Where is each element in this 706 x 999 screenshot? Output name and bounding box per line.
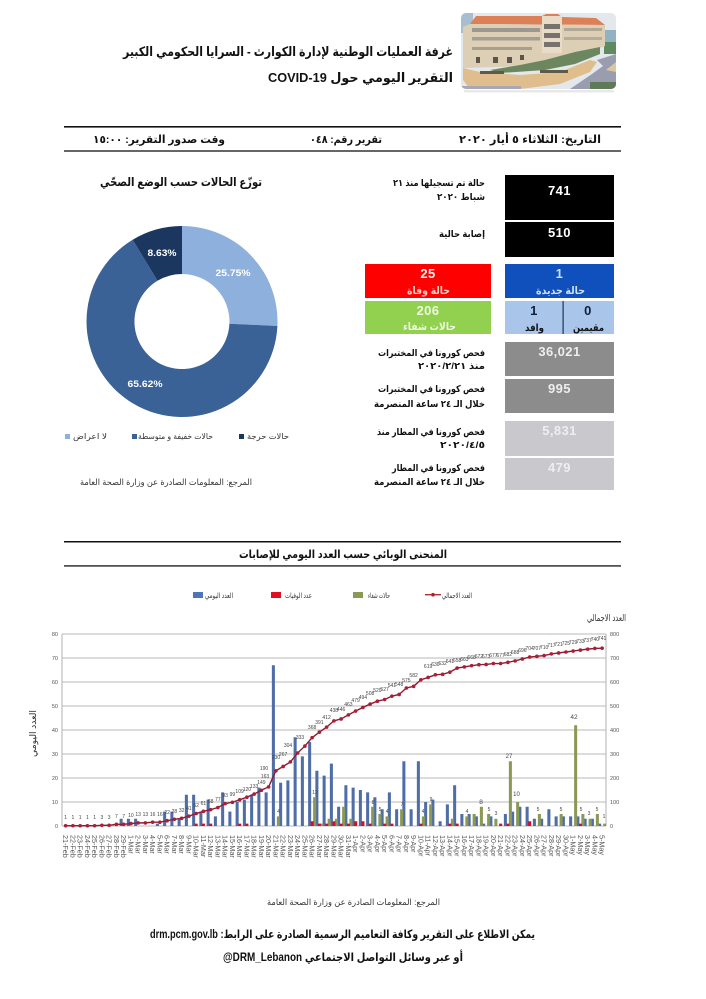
cumulative data labels: 7 xyxy=(115,814,118,820)
stat: airport tests total: فحص كورونا في المطار منذ xyxy=(377,427,485,438)
stat: lab tests total: فحص كورونا في المختبرات xyxy=(378,348,485,359)
recovery data labels: 5 xyxy=(596,807,599,813)
stat: total cases xyxy=(393,175,614,220)
cumulative data labels: 673 xyxy=(482,654,490,660)
date axis labels: 1-Mar xyxy=(126,835,135,854)
left axis labels: 80 xyxy=(52,632,58,638)
right axis labels: 200 xyxy=(610,776,619,782)
cumulative data labels: 391 xyxy=(315,720,324,726)
cumulative data labels: 494 xyxy=(359,695,367,701)
recovery data labels: 12 xyxy=(312,790,318,796)
chart legend: العدد اليومي xyxy=(205,591,233,600)
cumulative data labels: 619 xyxy=(424,664,432,670)
stat: airport tests 24h: 479 xyxy=(548,460,571,475)
stat: airport tests total: ٢٠٢٠/٤/٥ xyxy=(440,440,485,451)
date axis labels: 7-Apr xyxy=(395,835,404,853)
date axis labels: 18-Mar xyxy=(250,835,259,858)
footer links: أو عبر وسائل التواصل الاجتماعي ‎@DRM_Lebanon xyxy=(223,949,463,965)
date axis labels: 8-Apr xyxy=(402,835,411,853)
recovery data labels: 4 xyxy=(277,809,280,815)
cumulative data labels: 688 xyxy=(511,650,519,656)
cumulative data labels: 99 xyxy=(230,792,235,798)
right axis labels: 800 xyxy=(610,632,619,638)
date axis labels: 19-Apr xyxy=(482,835,491,857)
date axis labels: 5-May xyxy=(598,835,607,855)
cumulative data labels: 548 xyxy=(395,682,403,688)
stat: new cases xyxy=(505,264,614,298)
date axis labels: 16-Mar xyxy=(235,835,244,858)
stat: recoveries: 206 xyxy=(417,303,439,318)
cumulative data labels: 582 xyxy=(409,673,418,679)
cumulative data labels: 368 xyxy=(308,725,316,731)
cumulative data labels: 438 xyxy=(330,708,338,714)
stat: total cases: حالة تم تسجيلها منذ ٢١ xyxy=(393,178,485,189)
panel: key figures xyxy=(365,175,614,490)
date axis labels: 15-Apr xyxy=(453,835,462,857)
recovery data labels: 3 xyxy=(495,811,498,817)
cumulative data labels: 133 xyxy=(250,784,258,790)
left axis labels: 10 xyxy=(52,800,58,806)
right axis labels: 700 xyxy=(610,656,619,662)
right axis labels: 500 xyxy=(610,704,619,710)
left axis labels: 30 xyxy=(52,752,58,758)
recovery data labels: 8 xyxy=(479,799,483,806)
cumulative data labels: 1 xyxy=(79,815,82,821)
date axis labels: 3-Apr xyxy=(366,835,375,853)
date axis labels: 9-Apr xyxy=(409,835,418,853)
cumulative data labels: 93 xyxy=(222,793,228,799)
date axis labels: 25-Apr xyxy=(525,835,534,857)
cumulative data labels: 463 xyxy=(344,702,353,708)
cumulative data labels: 230 xyxy=(272,755,280,761)
date axis labels: 29-Apr xyxy=(554,835,563,857)
recovery data labels: 5 xyxy=(580,807,583,813)
recovery data labels: 8 xyxy=(372,800,375,806)
stat: current cases xyxy=(439,222,614,257)
cumulative data labels: 68 xyxy=(208,799,214,805)
stat: total cases: 741 xyxy=(548,183,571,198)
date axis labels: 19-Mar xyxy=(257,835,266,858)
recovery data labels: 5 xyxy=(379,807,382,813)
recovery data labels: 27 xyxy=(506,754,513,760)
date axis labels: 22-Mar xyxy=(279,835,288,858)
cumulative data labels: 412 xyxy=(322,715,331,721)
cumulative data labels: 13 xyxy=(143,812,148,818)
cumulative data labels: 575 xyxy=(402,678,411,684)
cumulative data labels: 3 xyxy=(101,815,104,821)
date axis labels: 6-Mar xyxy=(163,835,172,854)
cumulative data labels: 446 xyxy=(337,707,345,713)
cumulative data labels: 1 xyxy=(93,815,96,821)
panel: health status donut xyxy=(65,175,289,487)
cumulative data labels: 3 xyxy=(108,815,111,821)
cumulative data labels: 149 xyxy=(257,780,266,786)
stat: deaths: 25 xyxy=(420,266,436,281)
stat: lab tests 24h: 995 xyxy=(548,381,571,396)
stat: residents and arrivals: 0 xyxy=(584,303,592,318)
donut chart: 65.62% xyxy=(128,379,162,389)
cumulative data labels: 190 xyxy=(260,766,268,772)
date axis labels: 31-Mar xyxy=(344,835,353,858)
left axis labels xyxy=(52,632,58,830)
cumulative data labels: 479 xyxy=(351,698,360,704)
title: غرفة العمليات الوطنية لإدارة الكوارث - السرايا الحكومي الكبير xyxy=(122,44,453,59)
date axis labels: 4-Mar xyxy=(148,835,157,854)
donut chart xyxy=(87,226,278,417)
date axis labels: 21-Mar xyxy=(271,835,280,858)
date axis labels: 26-Feb xyxy=(97,835,106,858)
cumulative data labels: 632 xyxy=(438,661,447,667)
cumulative data labels: 721 xyxy=(554,642,563,648)
cumulative data labels: 668 xyxy=(467,655,476,661)
stat: deaths xyxy=(365,264,491,298)
cumulative data labels: 304 xyxy=(284,743,292,749)
recovery data labels: 3 xyxy=(588,811,591,817)
date axis labels: 12-Mar xyxy=(206,835,215,858)
report info bar: تقرير رقم: ٠٤٨ xyxy=(310,134,382,146)
stat: airport tests total: 5,831 xyxy=(542,423,577,438)
cumulative data labels: 16 xyxy=(150,812,156,818)
cumulative data labels: 541 xyxy=(388,683,396,689)
date axis labels: 15-Mar xyxy=(228,835,237,858)
right axis labels: 300 xyxy=(610,752,619,758)
date axis labels: 17-Mar xyxy=(242,835,251,858)
stat: lab tests 24h: خلال الـ ٢٤ ساعة المنصرمة xyxy=(374,399,485,410)
right axis labels: 0 xyxy=(610,824,613,830)
date axis labels: 8-Mar xyxy=(177,835,186,854)
date axis labels: 2-Apr xyxy=(358,835,367,853)
date axis labels: 6-Apr xyxy=(387,835,396,853)
date axis labels: 13-Mar xyxy=(213,835,222,858)
stat: recoveries xyxy=(365,301,491,334)
date axis labels: 30-Mar xyxy=(337,835,346,858)
date axis labels: 17-Apr xyxy=(467,835,476,857)
left axis labels: 50 xyxy=(52,704,58,710)
date axis labels: 5-Apr xyxy=(380,835,389,853)
right axis labels xyxy=(610,632,619,830)
date axis labels: 14-Apr xyxy=(445,835,454,857)
cumulative data labels: 7 xyxy=(122,814,125,820)
date axis labels: 23-Apr xyxy=(511,835,520,857)
date axis labels: 23-Feb xyxy=(76,835,85,858)
left axis labels: 70 xyxy=(52,656,58,662)
recovery data labels: 42 xyxy=(570,714,578,721)
chart legend: العدد الاجمالي xyxy=(442,591,472,600)
cumulative data labels: 16 xyxy=(157,812,163,818)
stat: lab tests 24h xyxy=(374,379,614,413)
cumulative data labels: 630 xyxy=(431,662,440,668)
date axis labels: 23-Mar xyxy=(286,835,295,858)
date axis labels: 5-Mar xyxy=(155,835,164,854)
donut legend: حالات حرجة xyxy=(247,432,289,441)
stat: total cases: شباط ٢٠٢٠ xyxy=(437,192,485,203)
stat: lab tests 24h: فحص كورونا في المختبرات xyxy=(378,384,485,395)
right axis labels: 100 xyxy=(610,800,619,806)
donut legend xyxy=(65,432,289,441)
date axis labels: 11-Apr xyxy=(424,835,433,857)
date axis labels: 22-Feb xyxy=(68,835,77,858)
cumulative data labels: 28 xyxy=(172,809,177,815)
date axis labels: 1-Apr xyxy=(351,835,360,853)
cumulative data labels: 677 xyxy=(489,653,498,659)
report info bar: التاريخ: الثلاثاء ٥ أيار ٢٠٢٠ xyxy=(459,132,601,146)
date axis labels: 27-Apr xyxy=(540,835,549,857)
bars: daily cases xyxy=(120,665,606,826)
date axis labels: 2-May xyxy=(576,835,585,855)
cumulative data labels: 704 xyxy=(525,646,534,652)
cumulative data labels: 682 xyxy=(504,652,512,658)
recovery data labels: 1 xyxy=(603,814,606,820)
cumulative data labels: 508 xyxy=(366,691,374,697)
cumulative data labels: 520 xyxy=(373,688,382,694)
recovery data labels: 9 xyxy=(430,797,433,803)
cumulative data labels: 710 xyxy=(540,645,548,651)
date axis labels: 1-May xyxy=(569,835,578,855)
left axis labels: 60 xyxy=(52,680,58,686)
left axis labels: 20 xyxy=(52,776,58,782)
image: Grand Serail building xyxy=(461,13,616,92)
date axis labels: 10-Apr xyxy=(416,835,425,857)
cumulative data labels: 725 xyxy=(562,641,570,647)
cumulative data labels: 13 xyxy=(135,812,141,818)
cumulative data labels: 672 xyxy=(475,654,483,660)
stat: recoveries: حالات شفاء xyxy=(403,321,456,333)
recovery data labels xyxy=(277,714,606,820)
donut chart: 8.63% xyxy=(148,248,176,258)
date axis labels: 26-Mar xyxy=(308,835,317,858)
date axis labels: 20-Mar xyxy=(264,835,273,858)
report info bar xyxy=(64,126,621,152)
cumulative data labels: 77 xyxy=(215,797,221,803)
stat: airport tests 24h xyxy=(374,458,614,490)
stat: current cases: إصابة حالية xyxy=(439,229,485,240)
cumulative data labels: 120 xyxy=(243,787,251,793)
cumulative data labels: 741 xyxy=(598,636,606,642)
stat: residents and arrivals: وافد xyxy=(525,323,544,334)
chart legend: حالات شفاء xyxy=(368,591,390,600)
date axis labels: 7-Mar xyxy=(170,835,179,854)
recovery data labels: 5 xyxy=(560,807,563,813)
date axis labels: 22-Apr xyxy=(503,835,512,857)
cumulative data labels: 1 xyxy=(86,815,89,821)
cumulative data labels: 333 xyxy=(296,735,304,741)
right axis labels: 400 xyxy=(610,728,619,734)
date axis labels: 27-Mar xyxy=(315,835,324,858)
cumulative data labels: 696 xyxy=(518,648,527,654)
stat: new cases: حالة جديدة xyxy=(536,285,585,297)
date axis labels: 2-Mar xyxy=(134,835,143,854)
recovery data labels: 4 xyxy=(466,809,469,815)
donut legend: حالات خفيفة و متوسطة xyxy=(138,432,213,441)
recovery data labels: 4 xyxy=(386,809,389,815)
left axis title: العدد اليومي xyxy=(28,710,38,757)
cumulative data labels: 41 xyxy=(186,806,192,812)
date axis labels: 24-Feb xyxy=(83,835,92,858)
footer links: يمكن الاطلاع على التقرير وكافة التعاميم الرسمية الصادرة على الرابط: drm.pcm.gov.lb xyxy=(150,929,535,942)
date axis labels: 16-Apr xyxy=(460,835,469,857)
combo chart: daily and cumulative cases xyxy=(28,613,626,858)
date axis labels: 11-Mar xyxy=(199,835,208,858)
date axis labels: 18-Apr xyxy=(474,835,483,857)
stat: deaths: حالة وفاة xyxy=(407,285,450,297)
cumulative data labels xyxy=(64,636,606,821)
title: التقرير اليومي حول COVID-19 xyxy=(268,70,453,85)
stat: residents and arrivals: مقيمين xyxy=(573,323,604,334)
cumulative data labels: 22 xyxy=(164,810,170,816)
chart legend: عدد الوفيات xyxy=(285,591,312,600)
cumulative data labels: 163 xyxy=(261,774,269,780)
date axis labels: 4-Apr xyxy=(373,835,382,853)
recovery data labels: 4 xyxy=(422,809,425,815)
date axis labels: 10-Mar xyxy=(192,835,201,858)
date axis labels: 28-Apr xyxy=(547,835,556,857)
recovery data labels: 10 xyxy=(513,792,520,798)
date axis labels xyxy=(61,835,607,858)
date axis labels: 13-Apr xyxy=(438,835,447,857)
stat: airport tests total xyxy=(377,421,614,456)
recovery data labels: 5 xyxy=(488,807,491,813)
stat: lab tests total xyxy=(378,342,614,376)
report info bar: وقت صدور التقرير: ١٥:٠٠ xyxy=(93,134,225,146)
stat: new cases: 1 xyxy=(556,266,563,281)
stat: airport tests 24h: خلال الـ ٢٤ ساعة المنصرمة xyxy=(374,477,485,488)
donut legend: لا اعراض xyxy=(73,432,107,441)
epidemic curve heading: المنحنى الوبائي حسب العدد اليومي للإصابات xyxy=(239,549,447,562)
right axis labels: 600 xyxy=(610,680,619,686)
cumulative data labels: 52 xyxy=(193,803,199,809)
date axis labels: 28-Feb xyxy=(112,835,121,858)
right axis title: العدد الاجمالي xyxy=(587,613,626,624)
stat: lab tests total: منذ ٢٠٢٠/٢/٢١ xyxy=(418,361,485,372)
cumulative data labels: 109 xyxy=(235,789,244,795)
cumulative data labels: 267 xyxy=(279,752,287,758)
date axis labels: 24-Apr xyxy=(518,835,527,857)
stat: current cases: 510 xyxy=(548,225,571,240)
date axis labels: 9-Mar xyxy=(184,835,193,854)
date axis labels: 26-Apr xyxy=(532,835,541,857)
date axis labels: 21-Feb xyxy=(61,835,70,858)
cumulative data labels: 32 xyxy=(179,808,185,814)
footer links xyxy=(150,929,535,965)
left axis labels: 40 xyxy=(52,728,58,734)
stat: lab tests total: 36,021 xyxy=(538,344,581,359)
chart source: المرجع: المعلومات الصادرة عن وزارة الصحة العامة xyxy=(267,897,440,907)
cumulative data labels: 527 xyxy=(380,687,389,693)
cumulative data labels: 733 xyxy=(576,639,585,645)
date axis labels: 25-Mar xyxy=(300,835,309,858)
date axis labels: 21-Apr xyxy=(496,835,505,857)
date axis labels: 4-May xyxy=(590,835,599,855)
date axis labels: 24-Mar xyxy=(293,835,302,858)
date axis labels: 25-Feb xyxy=(90,835,99,858)
cumulative data labels: 61 xyxy=(201,801,206,807)
donut heading: توزّع الحالات حسب الوضع الصحّي xyxy=(100,175,262,190)
cumulative data labels: 1 xyxy=(64,815,67,821)
cumulative data labels: 737 xyxy=(583,638,592,644)
date axis labels: 14-Mar xyxy=(221,835,230,858)
cumulative data labels: 1 xyxy=(72,815,75,821)
line: cumulative cases xyxy=(66,648,602,826)
donut chart: 25.75% xyxy=(216,268,250,278)
date axis labels: 20-Apr xyxy=(489,835,498,857)
date axis labels: 27-Feb xyxy=(105,835,114,858)
donut source: المرجع: المعلومات الصادرة عن وزارة الصحة العامة xyxy=(80,477,252,487)
cumulative data labels: 717 xyxy=(547,643,556,649)
date axis labels: 30-Apr xyxy=(561,835,570,857)
recovery data labels: 5 xyxy=(537,807,540,813)
cumulative data labels: 707 xyxy=(533,646,541,652)
left axis labels: 0 xyxy=(55,824,58,830)
stat: airport tests 24h: فحص كورونا في المطار xyxy=(391,463,485,474)
cumulative data labels: 658 xyxy=(453,658,461,664)
date axis labels: 12-Apr xyxy=(431,835,440,857)
stat: residents and arrivals: 1 xyxy=(530,303,538,318)
date axis labels: 29-Feb xyxy=(119,835,128,858)
cumulative data labels: 677 xyxy=(496,653,505,659)
chart legend xyxy=(193,591,472,600)
date axis labels: 3-May xyxy=(583,835,592,855)
date axis labels: 29-Mar xyxy=(329,835,338,858)
cumulative data labels: 740 xyxy=(591,637,599,643)
cumulative data labels: 663 xyxy=(460,657,469,663)
cumulative data labels: 641 xyxy=(446,659,454,665)
title xyxy=(122,44,453,85)
cumulative data labels: 729 xyxy=(569,640,577,646)
stat: residents and arrivals xyxy=(505,301,614,334)
date axis labels: 28-Mar xyxy=(322,835,331,858)
date axis labels: 3-Mar xyxy=(141,835,150,854)
cumulative data labels: 10 xyxy=(128,813,134,819)
recovery data labels: 7 xyxy=(401,802,404,808)
